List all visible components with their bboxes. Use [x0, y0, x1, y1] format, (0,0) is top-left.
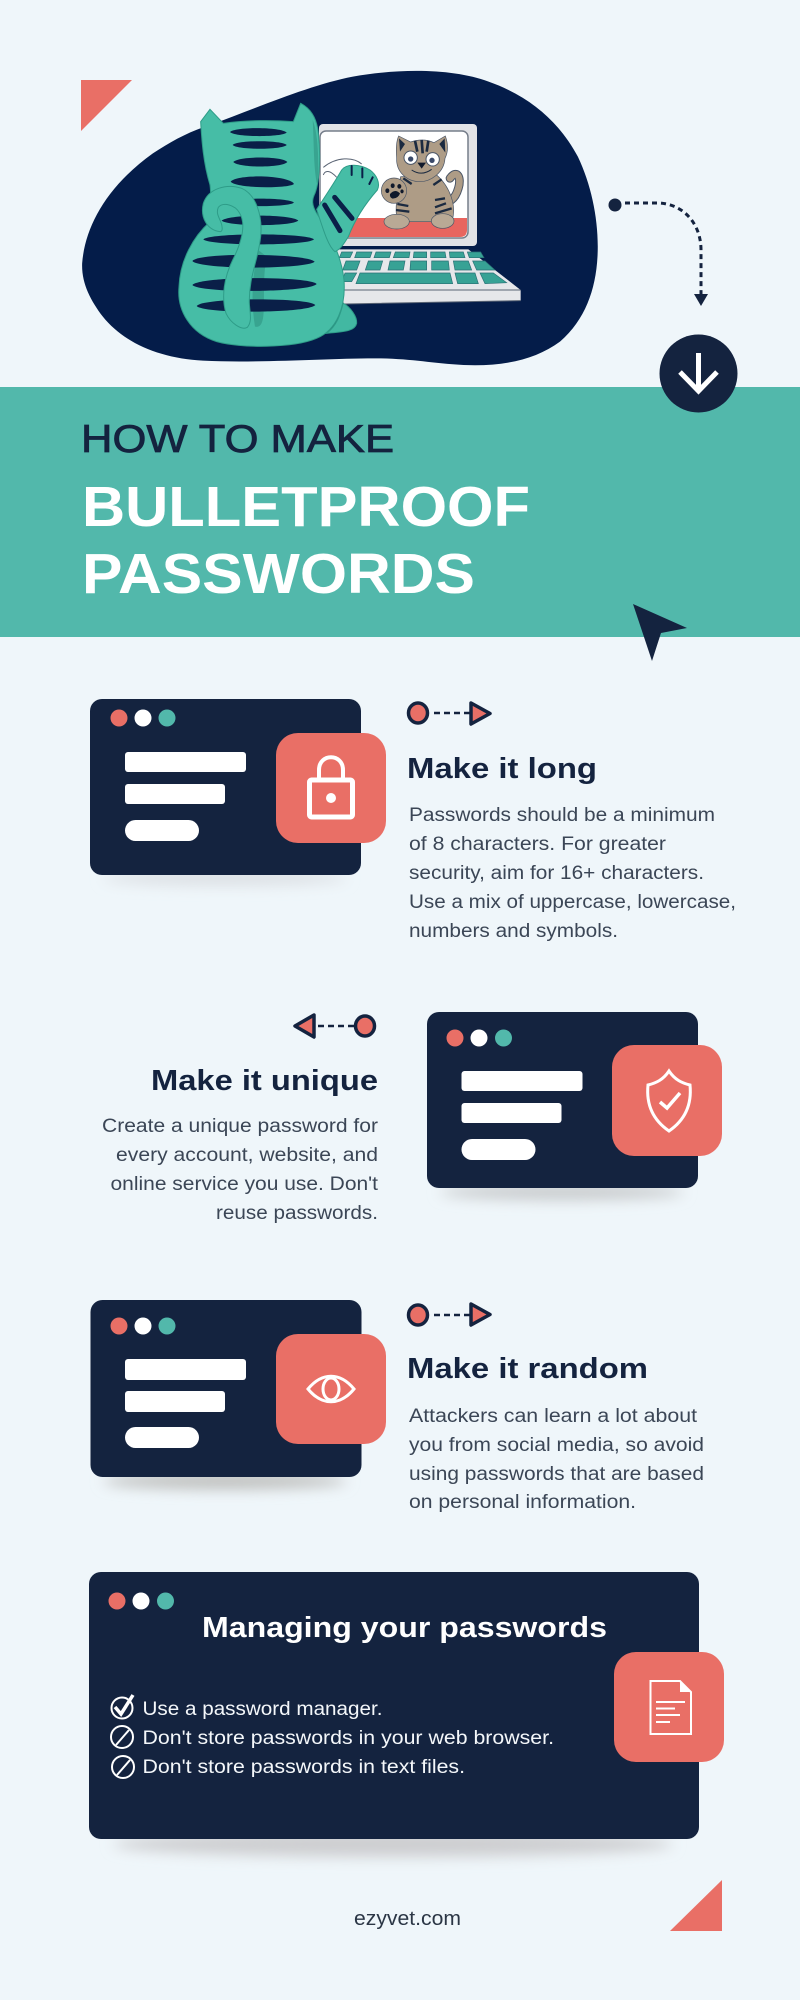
icon: shield with check: [612, 1045, 722, 1156]
icon: document: [614, 1652, 724, 1762]
body text: every account, website, and: [116, 1145, 378, 1166]
heading: Managing your passwords: [202, 1612, 607, 1644]
title: HOW TO MAKE: [81, 418, 394, 461]
browser window card: [90, 699, 361, 875]
hero illustration: cat video call: [82, 71, 598, 365]
footer text: ezyvet.com: [354, 1908, 461, 1930]
icon: prohibited: [112, 1756, 134, 1778]
body text: online service you use. Don't: [110, 1174, 379, 1195]
title: [81, 418, 530, 606]
body text: [102, 1116, 379, 1224]
body text: you from social media, so avoid: [409, 1435, 704, 1456]
icon: check mark: [112, 1695, 133, 1718]
icon: eye: [276, 1334, 386, 1444]
card shadow: [440, 1184, 684, 1200]
body text: Use a mix of uppercase, lowercase,: [409, 892, 736, 913]
back stripes: [192, 128, 317, 312]
title: PASSWORDS: [82, 542, 475, 606]
body text: using passwords that are based: [409, 1464, 704, 1485]
large teal cat seen from behind: [179, 103, 379, 346]
card shadow: [103, 1473, 347, 1489]
heading: Make it unique: [151, 1065, 378, 1097]
arrow: dashed right: [408, 703, 490, 724]
heading: Make it long: [407, 753, 597, 785]
body text: of 8 characters. For greater: [409, 834, 667, 855]
icon: prohibited: [111, 1726, 133, 1748]
body text: security, aim for 16+ characters.: [409, 863, 704, 884]
corner triangle: top left: [81, 80, 132, 131]
tail: [202, 186, 261, 328]
body text: Passwords should be a minimum: [409, 805, 715, 826]
heading: Make it random: [407, 1353, 648, 1385]
dotted arrow pointing down: [608, 198, 708, 306]
checklist: Don't store passwords in text files.: [142, 1757, 465, 1778]
body text: numbers and symbols.: [409, 921, 618, 942]
card shadow: [103, 871, 347, 885]
body text: [409, 805, 736, 942]
panel: make it long: [90, 699, 736, 942]
body text: [409, 1406, 704, 1513]
navy blob: [82, 71, 598, 365]
card shadow: [113, 1831, 673, 1857]
browser window card: [89, 1572, 699, 1839]
browser window card: [90, 1300, 362, 1477]
panel: managing your passwords: [89, 1572, 724, 1857]
cursor arrow icon: [633, 604, 687, 661]
panel: make it unique: [102, 1012, 722, 1224]
title: BULLETPROOF: [82, 475, 530, 539]
checklist: [111, 1695, 554, 1778]
body text: on personal information.: [409, 1492, 636, 1513]
checklist: Don't store passwords in your web browser.: [142, 1728, 554, 1749]
browser window card: [427, 1012, 698, 1188]
teal title band: [0, 387, 800, 637]
arrow: dashed left: [295, 1015, 374, 1037]
laptop screen: [319, 124, 477, 246]
checklist: Use a password manager.: [142, 1699, 382, 1720]
arrow: dashed right: [408, 1304, 490, 1325]
small tabby cat on screen: [381, 136, 459, 229]
panel: make it random: [90, 1300, 704, 1513]
icon: padlock: [276, 733, 386, 843]
waving arm: [317, 165, 379, 252]
body text: Create a unique password for: [102, 1116, 379, 1137]
body text: reuse passwords.: [216, 1203, 378, 1224]
body text: Attackers can learn a lot about: [409, 1406, 698, 1427]
corner triangle: bottom right: [670, 1880, 722, 1931]
circular down arrow button: [660, 334, 738, 412]
laptop keyboard: [336, 249, 521, 304]
